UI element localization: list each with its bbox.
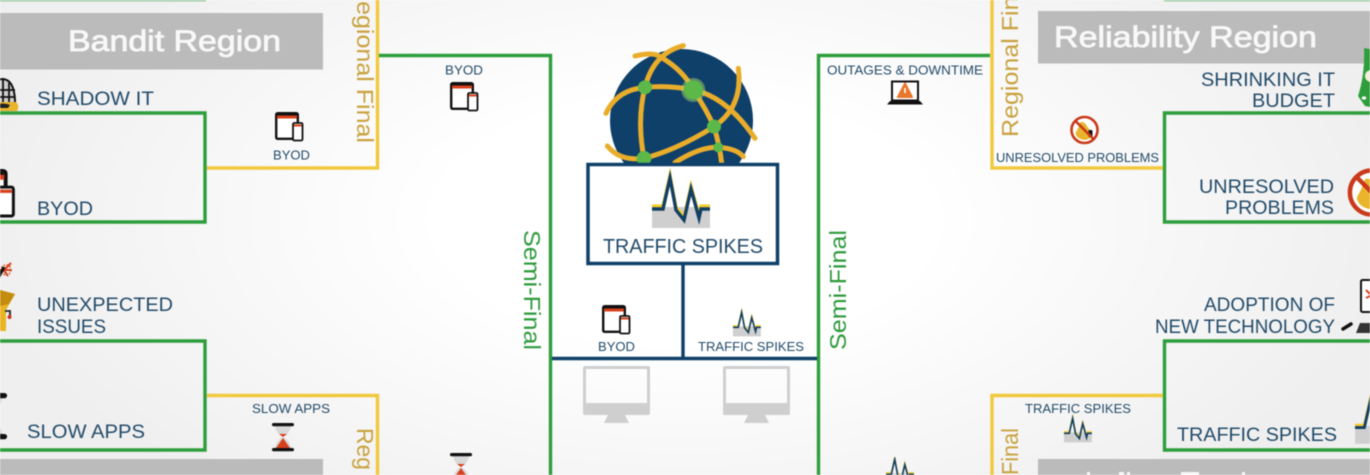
left semi-final bracket [379, 56, 550, 475]
right semi-final bracket [818, 56, 990, 475]
final bracket lines [552, 264, 817, 358]
left bracket: lower [0, 341, 378, 475]
text: TRAFFIC SPIKES finalist: TRAFFIC SPIKES [698, 340, 804, 354]
heading: Bandit Region [0, 13, 323, 70]
text: BYOD finalist: BYOD [598, 340, 635, 354]
icon: unexpected issues [0, 263, 15, 331]
icon: BYOD finalist [603, 306, 630, 334]
right bracket: upper [992, 0, 1370, 222]
text: BYOD left: BYOD [37, 199, 93, 220]
icon: shadow IT dome [0, 79, 18, 111]
text: UNEXPECTED ISSUES: UNEXPECTED [37, 295, 173, 316]
text: TRAFFIC SPIKES right: TRAFFIC SPIKES [1177, 425, 1337, 446]
icon: traffic spike semi-final right [885, 456, 915, 475]
text: UNEXPECTED ISSUES: ISSUES [37, 317, 106, 338]
text: BYOD regional left: BYOD [273, 148, 310, 162]
text: TRAFFIC SPIKES champion: TRAFFIC SPIKES [603, 236, 763, 258]
icon: BYOD semi-final left [451, 83, 478, 110]
text: ADOPTION OF NEW TECHNOLOGY: NEW TECHNOLOGY [1155, 317, 1335, 338]
icon: new technology computer [1343, 280, 1370, 333]
label: Semi-Final right: Semi-Final [825, 230, 851, 350]
icon: hourglass regional left [272, 423, 294, 451]
text: SHRINKING IT BUDGET: SHRINKING IT [1201, 70, 1335, 91]
text: SHRINKING IT BUDGET: BUDGET [1252, 91, 1335, 112]
right bracket: lower [992, 341, 1370, 475]
icon: monitor right [723, 366, 790, 423]
text: SLOW APPS regional left: SLOW APPS [252, 402, 330, 416]
text: SHRINKING IT BUDGET [1201, 70, 1335, 112]
icon: no sign large [1350, 170, 1370, 215]
text: UNEXPECTED ISSUES [37, 295, 173, 338]
icon: BYOD regional left [276, 113, 302, 140]
icon: traffic spike finalist [733, 311, 761, 336]
icon: monitor left [583, 366, 650, 423]
icon: traffic spike large right [1355, 399, 1370, 444]
heading: lower right region band [1038, 459, 1370, 475]
text: UNRESOLVED PROBLEMS: UNRESOLVED [1199, 177, 1334, 198]
text: UNRESOLVED PROBLEMS regional right: UNRESOLVED PROBLEMS [996, 151, 1159, 165]
heading: Bandit Region: Bandit Region [68, 25, 281, 58]
label: Regional Final lower left: Reg [352, 428, 378, 470]
text: BYOD semi-final left: BYOD [445, 64, 483, 78]
icon: hourglass semi-final left [449, 452, 473, 475]
icon: BYOD large left [0, 171, 13, 216]
panel: champion Traffic Spikes [588, 164, 778, 264]
text: OUTAGES & DOWNTIME: OUTAGES & DOWNTIME [827, 64, 983, 78]
heading: lower left region band [0, 459, 323, 475]
text: TRAFFIC SPIKES regional right: TRAFFIC SPIKES [1025, 402, 1131, 416]
icon: no sign regional right [1072, 117, 1098, 143]
icon: traffic spike large [652, 175, 710, 228]
icon: laptop warning [887, 82, 923, 104]
icon: globe [602, 42, 758, 164]
label: Regional Final lower right: Final [997, 428, 1023, 475]
icon: hourglass large left [0, 393, 7, 439]
text: SLOW APPS left: SLOW APPS [27, 422, 145, 443]
icon: traffic spike regional right [1064, 417, 1092, 442]
text: UNRESOLVED PROBLEMS: PROBLEMS [1225, 198, 1334, 219]
text: ADOPTION OF NEW TECHNOLOGY: ADOPTION OF [1204, 295, 1335, 316]
heading: Reliability Region [1038, 11, 1370, 64]
left bracket: upper [0, 0, 378, 222]
heading: Reliability Region: Reliability Region [1054, 21, 1317, 54]
icon: money [1358, 48, 1370, 108]
label: Semi-Final left: Semi-Final [519, 230, 545, 350]
text: SHADOW IT: SHADOW IT [37, 89, 154, 110]
text: ADOPTION OF NEW TECHNOLOGY [1155, 295, 1335, 338]
text: UNRESOLVED PROBLEMS [1199, 177, 1334, 219]
